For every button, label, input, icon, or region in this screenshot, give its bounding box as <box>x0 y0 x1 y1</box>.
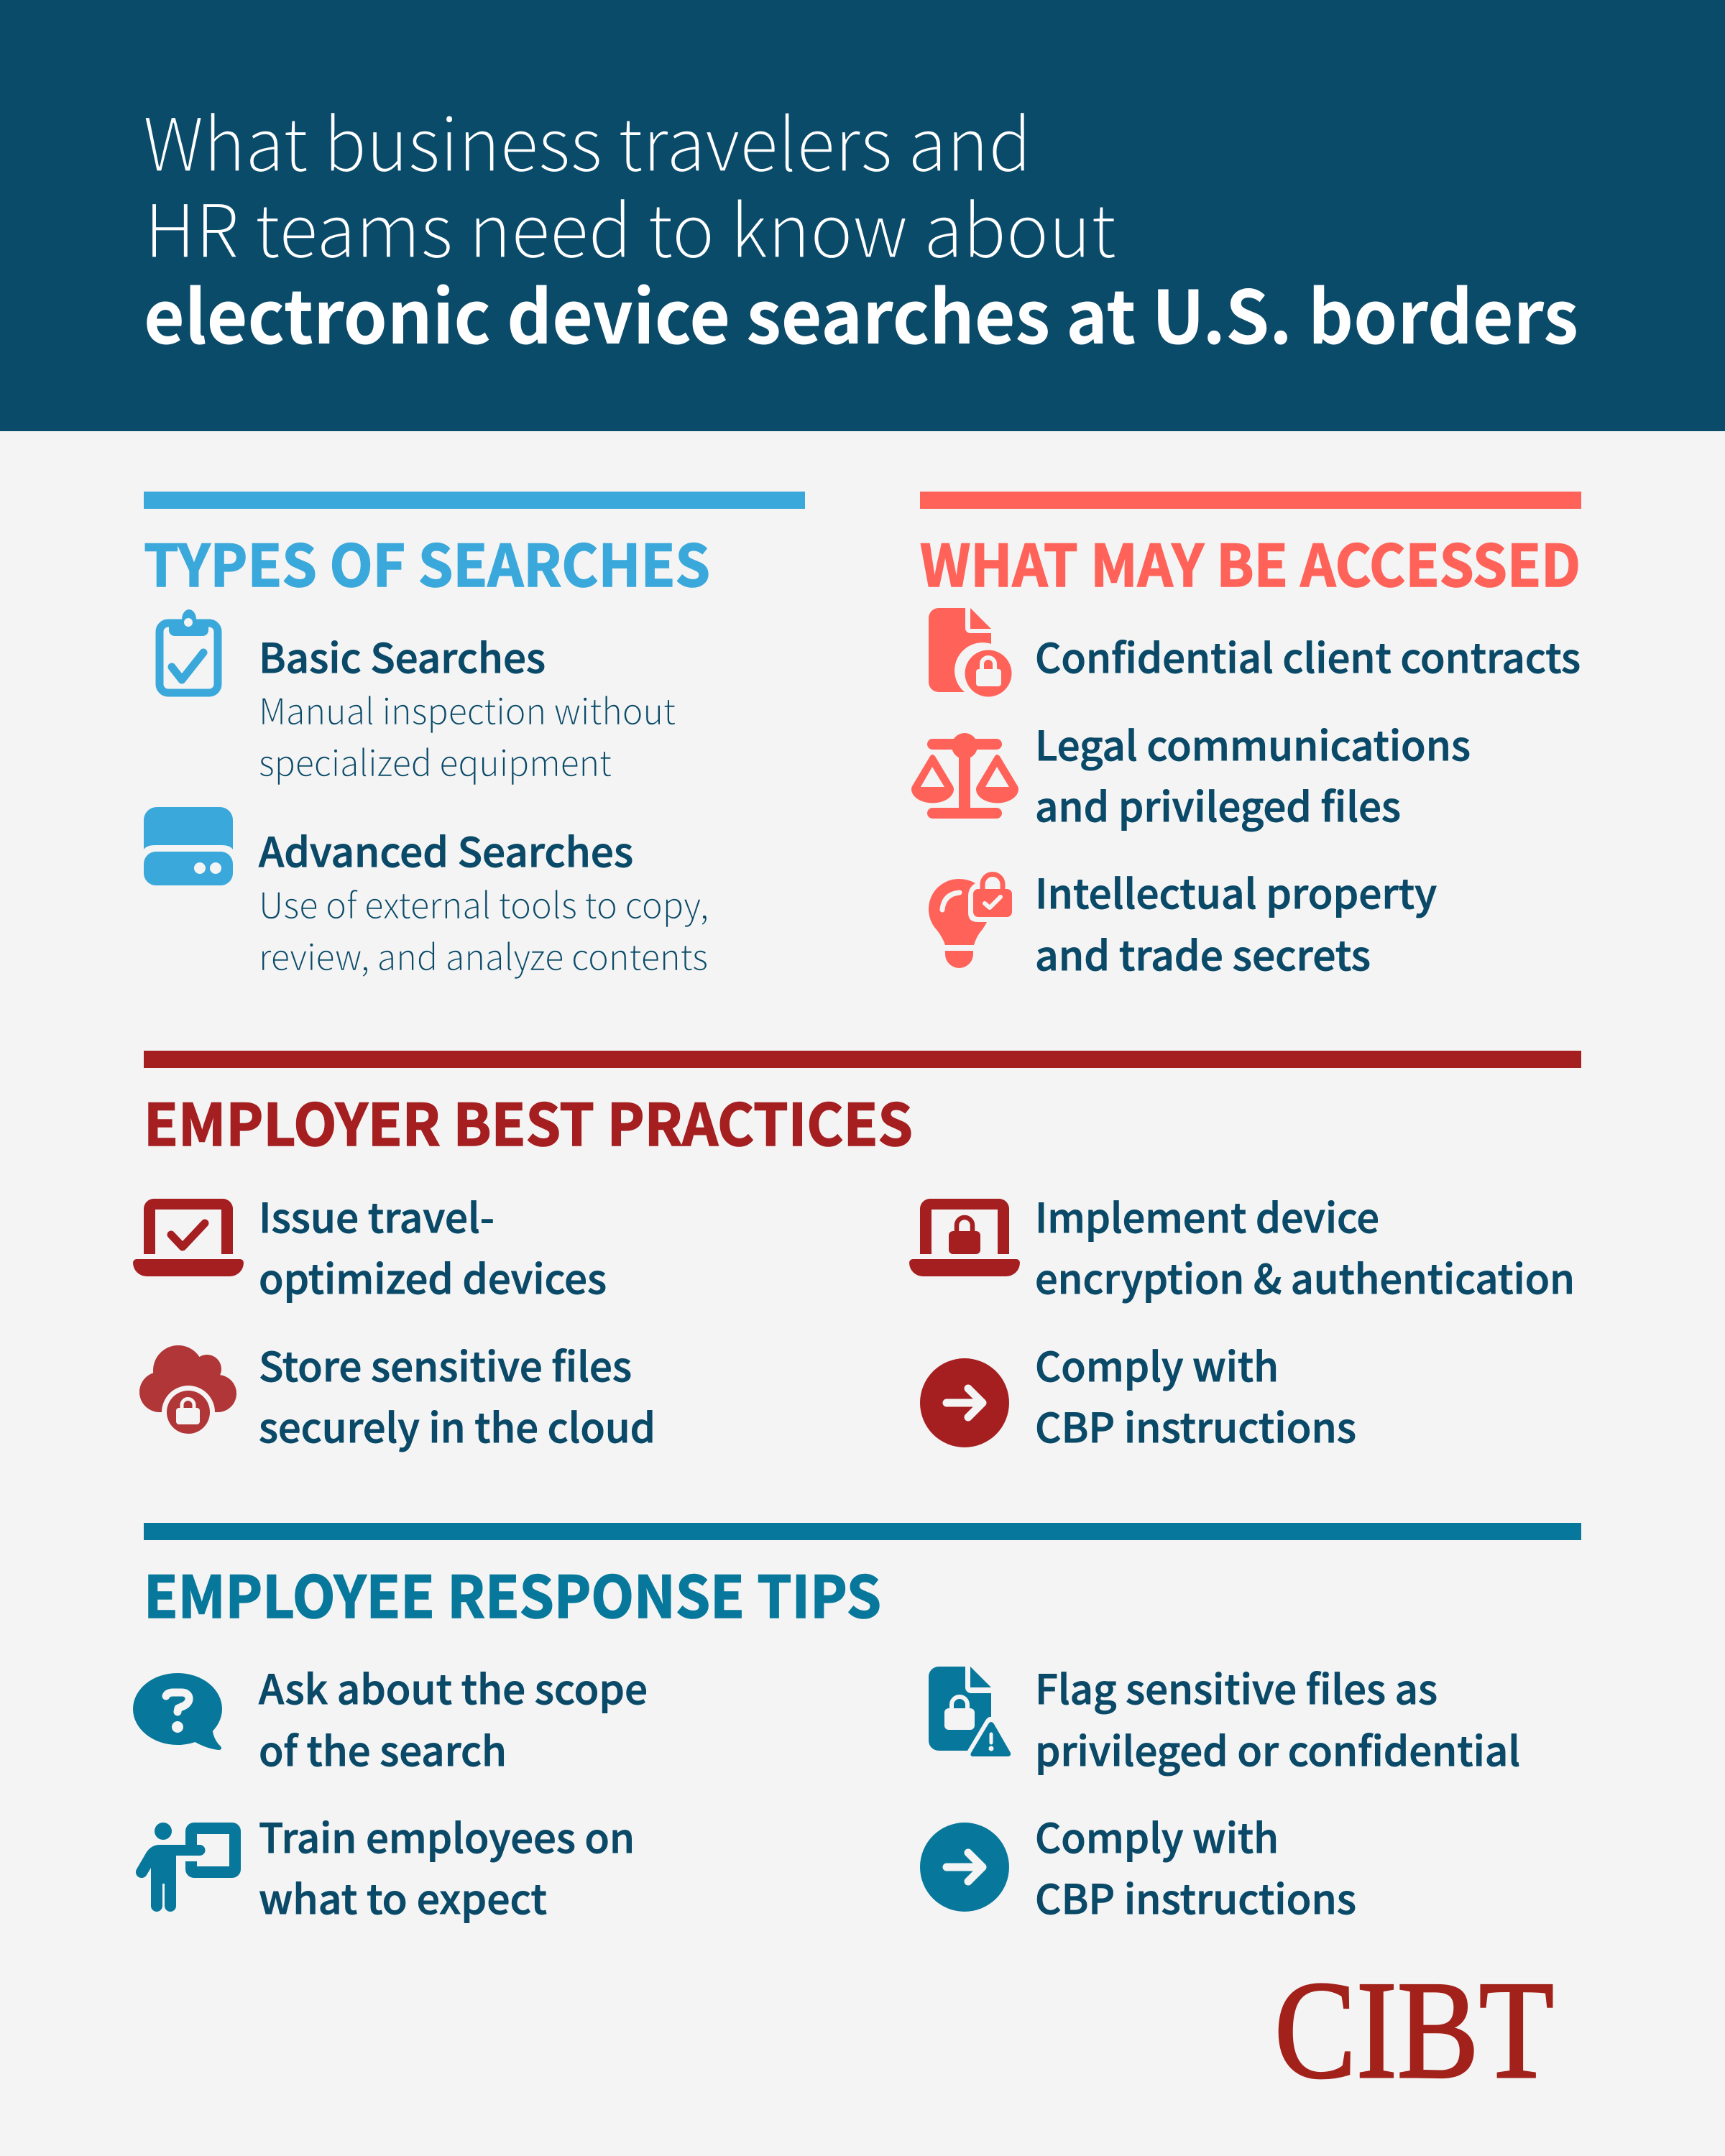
item: comply with cbp instructions: CBP instructions <box>1035 1396 1356 1455</box>
icon: arrow circle teal <box>920 1823 1009 1912</box>
icon: document with lock and warning <box>929 1667 1011 1756</box>
item: comply with cbp instructions: Comply with <box>1035 1335 1279 1393</box>
icon: document with lock <box>929 608 1012 697</box>
heading: types of searches: TYPES OF SEARCHES <box>144 520 710 604</box>
icon: storage drive <box>144 807 233 885</box>
item: legal communications <box>1035 714 1471 834</box>
item: comply with cbp instructions: Comply with <box>1035 1807 1279 1865</box>
item: store sensitive files: securely in the cloud <box>259 1396 656 1455</box>
item: advanced searches: Use of external tools to copy, <box>259 877 709 929</box>
item: issue travel-optimized devices: Issue travel- <box>259 1187 494 1245</box>
item: train employees: Train employees on <box>259 1807 635 1865</box>
item: comply with cbp instructions: CBP instructions <box>1035 1868 1356 1926</box>
item: intellectual property <box>1035 862 1437 982</box>
heading: employee response tips: EMPLOYEE RESPONSE TIPS <box>144 1552 881 1635</box>
title: electronic device searches at U.S. borders <box>144 259 1578 365</box>
item: advanced searches: review, and analyze contents <box>259 929 708 981</box>
item: store sensitive files <box>259 1335 656 1455</box>
icon: cloud with lock <box>139 1345 236 1442</box>
item: ask about the scope <box>259 1658 648 1778</box>
item: store sensitive files: Store sensitive files <box>259 1335 632 1393</box>
item: comply with cbp instructions <box>1035 1807 1356 1926</box>
icon: clipboard <box>160 609 218 693</box>
icon: light bulb with lock <box>929 874 1012 968</box>
icon: laptop with check <box>133 1199 244 1276</box>
item: implement device encryption: encryption & authentication <box>1035 1248 1575 1306</box>
title <box>143 87 1578 365</box>
item: advanced searches <box>259 821 709 981</box>
item: advanced searches: Advanced Searches <box>259 821 633 879</box>
heading: what may be accessed: WHAT MAY BE ACCESSED <box>920 520 1581 604</box>
panel: what may be accessed <box>911 492 1581 982</box>
item: intellectual property: and trade secrets <box>1035 924 1371 982</box>
item: basic searches: specialized equipment <box>259 735 612 787</box>
item: train employees <box>259 1807 635 1926</box>
item: implement device encryption <box>1035 1187 1575 1306</box>
item: confidential client contracts: Confidential client contracts <box>1035 627 1581 685</box>
panel: employer best practices <box>133 1051 1581 1455</box>
item: legal communications: and privileged files <box>1035 775 1401 834</box>
item: implement device encryption: Implement device <box>1035 1187 1379 1245</box>
item: flag sensitive files: privileged or confidential <box>1035 1720 1520 1778</box>
icon: scales of justice <box>911 733 1018 819</box>
icon: speech bubble question <box>133 1673 222 1750</box>
logo: CIBT: CIBT <box>1274 1953 1554 2108</box>
title: HR teams need to know about <box>144 173 1116 279</box>
item: basic searches <box>259 627 676 787</box>
item: intellectual property: Intellectual property <box>1035 862 1437 921</box>
item: flag sensitive files: Flag sensitive files as <box>1035 1658 1438 1716</box>
panel: employee response tips <box>133 1523 1581 1926</box>
item: flag sensitive files <box>1035 1658 1520 1778</box>
item: train employees: what to expect <box>259 1868 547 1926</box>
item: basic searches: Basic Searches <box>259 627 546 685</box>
item: ask about the scope: Ask about the scope <box>259 1658 648 1716</box>
icon: arrow circle <box>920 1358 1009 1447</box>
item: comply with cbp instructions <box>1035 1335 1356 1455</box>
icon: trainer at board <box>136 1823 241 1912</box>
icon: laptop with lock <box>909 1199 1020 1276</box>
item: ask about the scope: of the search <box>259 1720 507 1778</box>
heading: employer best practices: EMPLOYER BEST PRACTICES <box>144 1079 913 1163</box>
item: basic searches: Manual inspection without <box>259 683 676 735</box>
title: What business travelers and <box>143 87 1031 193</box>
panel: types of searches <box>144 492 805 981</box>
header banner <box>0 0 1725 431</box>
item: issue travel-optimized devices <box>259 1187 607 1306</box>
item: issue travel-optimized devices: optimized devices <box>259 1248 607 1306</box>
item: legal communications: Legal communications <box>1035 714 1471 773</box>
